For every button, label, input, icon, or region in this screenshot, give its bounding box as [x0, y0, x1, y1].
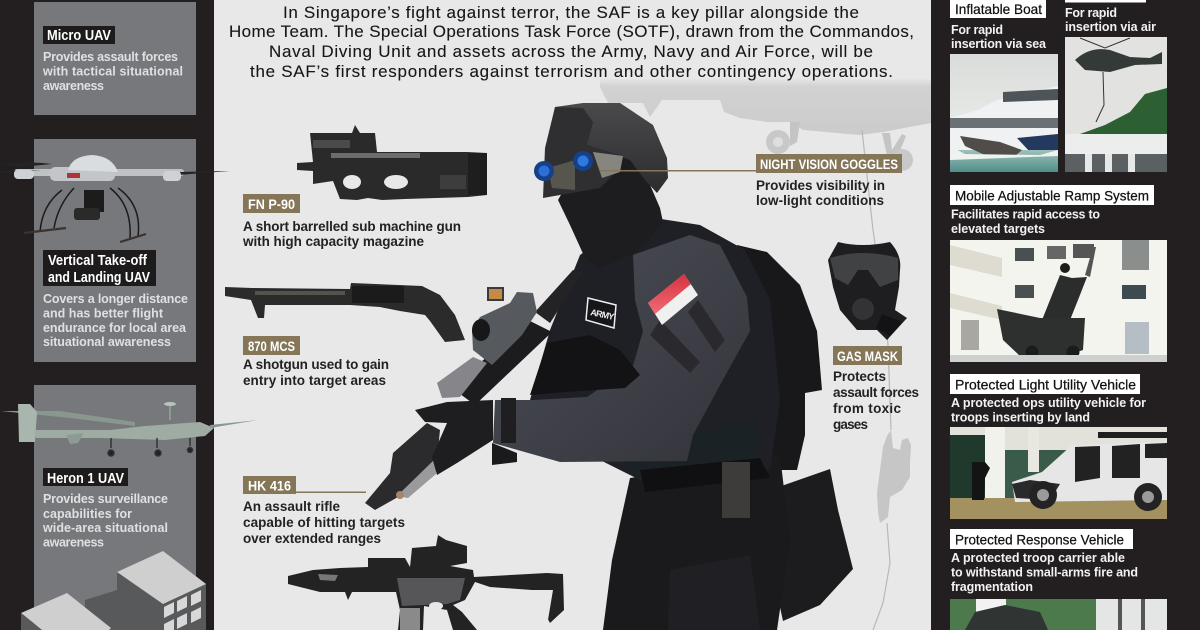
text: HK 416 description: capable of hitting targets [243, 515, 405, 530]
text: Night Vision description: low-light conditions [756, 193, 884, 208]
intro text: In Singapore’s fight against terror, the SAF is a key pillar alongside the [283, 3, 859, 22]
text: ramp description: elevated targets [951, 222, 1045, 236]
text: response vehicle description: to withstand small-arms fire and [951, 566, 1138, 580]
soldier: glove [415, 400, 493, 475]
soldier: cuff strap [501, 398, 516, 443]
panel: Protected Response Vehicle [950, 529, 1167, 630]
photo: helicopter [1065, 37, 1167, 172]
left dark column [0, 0, 214, 630]
text: Gas Mask description: Protects [833, 369, 886, 384]
label: FN P-90: FN P-90 [248, 196, 295, 212]
text: helicopter description: insertion via air [1065, 20, 1156, 34]
soldier: helmet [548, 103, 668, 193]
label: VTOL UAV: and Landing UAV [48, 270, 150, 286]
photo: utility vehicle [950, 427, 1167, 519]
panel: Mobile Adjustable Ramp System [950, 185, 1167, 362]
text: VTOL description: situational awareness [43, 335, 171, 349]
label: Micro UAV: Micro UAV [47, 28, 111, 44]
text: VTOL description: Covers a longer distance [43, 292, 188, 306]
text: boat description: insertion via sea [951, 37, 1047, 51]
text: response vehicle description: fragmentation [951, 580, 1033, 594]
soldier: lower torso [620, 420, 757, 478]
label: Inflatable Boat: Inflatable Boat [955, 1, 1042, 17]
panel: Protected Light Utility Vehicle [950, 374, 1167, 519]
soldier: balaclava and neck [558, 150, 663, 268]
text: HK 416 description: An assault rifle [243, 499, 340, 514]
label: Protected Response Vehicle: Protected Response Vehicle [955, 532, 1124, 548]
soldier: chest magazines [530, 335, 640, 395]
weapon: FN P-90 [297, 125, 487, 200]
icon: gas mask [828, 242, 907, 340]
soldier: velcro panels [650, 300, 725, 373]
soldier: backpack [737, 245, 822, 470]
label: HK 416 with leader line [243, 476, 366, 494]
label: Mobile Adjustable Ramp System: Mobile Adjustable Ramp System [955, 188, 1149, 204]
soldier: night vision goggles [534, 107, 623, 198]
text: Heron description: capabilities for [43, 507, 132, 521]
text: Heron description: awareness [43, 536, 104, 550]
soldier: magazine well [492, 443, 517, 465]
text: boat description: For rapid [951, 23, 1003, 37]
soldier: sleeve arm [493, 235, 750, 462]
text: 870 MCS description: A shotgun used to gain [243, 357, 389, 372]
text: Heron description: wide-area situational [42, 521, 168, 535]
text: FN P-90 description: with high capacity magazine [242, 234, 424, 249]
weapon: 870 MCS shotgun [225, 283, 465, 342]
soldier: torso and vest [530, 215, 780, 480]
text: response vehicle description: A protected troop carrier able [951, 551, 1125, 565]
panel: Inflatable Boat [950, 0, 1058, 172]
soldier: army patch [586, 298, 616, 328]
label: Helicopter [1065, 0, 1146, 2]
intro text: the SAF’s first responders against terrorism and other contingency operations. [250, 62, 893, 81]
text: Micro UAV description: Provides assault forces [43, 50, 178, 64]
icon: Heron drone [1, 402, 258, 456]
label: Heron 1 UAV: Heron 1 UAV [47, 471, 124, 487]
text: Gas Mask description: gases [833, 417, 868, 432]
soldier figure [365, 103, 853, 630]
label: 870 MCS: 870 MCS [248, 338, 295, 354]
text: utility vehicle description: troops inserting by land [951, 410, 1090, 424]
weapon: HK 416 rifle [288, 535, 564, 630]
panel: Vertical Take-off and Landing UAV [0, 139, 230, 362]
text: FN P-90 description: A short barrelled sub machine gun [243, 219, 461, 234]
text: helicopter description: For rapid [1065, 6, 1117, 20]
label: VTOL UAV [43, 250, 156, 286]
background rope and rappelling silhouette [862, 130, 911, 630]
text: ramp description: Facilitates rapid access to [951, 208, 1100, 222]
label: Gas Mask: GAS MASK [837, 348, 898, 364]
text: utility vehicle description: A protected ops utility vehicle for [951, 396, 1146, 410]
text: Gas Mask description: from toxic [833, 401, 901, 416]
label: Night Vision Goggles with leader line: NIGHT VISION GOGGLES [760, 156, 898, 172]
photo: boat and ship [950, 54, 1058, 172]
intro text: Naval Diving Unit and assets across the Army, Navy and Air Force, will be [269, 42, 873, 61]
panel: Heron 1 UAV [1, 385, 258, 630]
text: Micro UAV description: awareness [43, 79, 104, 93]
text: VTOL description: and has better flight [43, 306, 164, 320]
background helicopter silhouette [600, 78, 931, 171]
label: Protected Light Utility Vehicle: Protected Light Utility Vehicle [955, 376, 1136, 392]
text: HK 416 description: over extended ranges [243, 531, 381, 546]
panel: Helicopter insertion [1065, 0, 1167, 172]
label: Night Vision Goggles with leader line [600, 154, 902, 173]
text: VTOL description: endurance for local area [43, 321, 187, 335]
icon: VTOL drone [0, 155, 230, 242]
soldier: legs [603, 455, 790, 630]
soldier: army patch: ARMY [590, 307, 615, 322]
panel: Micro UAV [34, 2, 196, 115]
right dark column [931, 0, 1200, 630]
text: Micro UAV description: with tactical situational [42, 64, 183, 78]
text: Gas Mask description: assault forces [833, 385, 919, 400]
soldier: rifle [365, 270, 583, 510]
text: Heron description: Provides surveillance [43, 492, 168, 506]
icon: buildings [21, 551, 206, 630]
soldier: pouch [770, 469, 853, 621]
photo: ramp vehicle at building [950, 240, 1167, 362]
label: HK 416 with leader line: HK 416 [248, 478, 291, 494]
intro text: Home Team. The Special Operations Task Force (SOTF), drawn from the Commandos, [229, 22, 914, 41]
text: Night Vision description: Provides visibility in [756, 178, 885, 193]
soldier: belt [640, 458, 770, 492]
text: 870 MCS description: entry into target areas [243, 373, 386, 388]
soldier: belt pouch [722, 462, 750, 518]
soldier: flag patch [648, 274, 698, 325]
label: VTOL UAV: Vertical Take-off [48, 253, 147, 269]
photo: response vehicle [950, 599, 1167, 630]
